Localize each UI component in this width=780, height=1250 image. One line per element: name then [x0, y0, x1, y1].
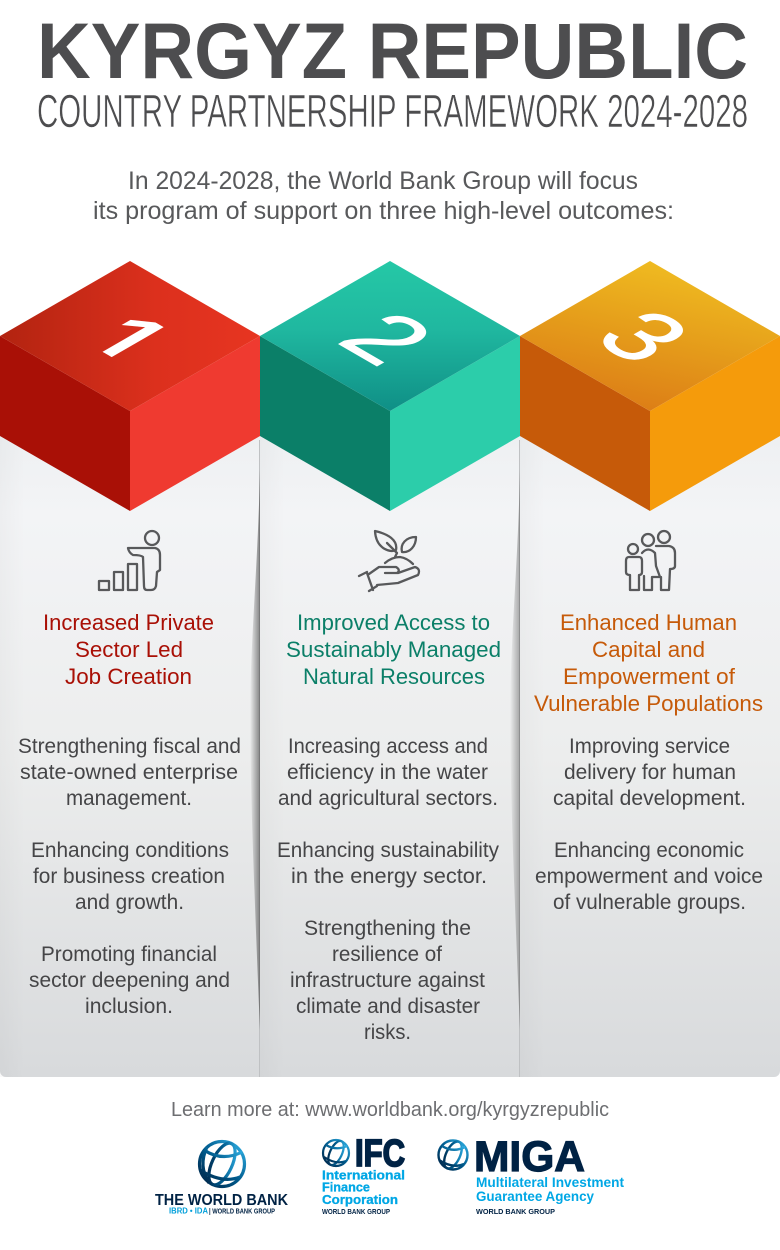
- intro text: its program of support on three high-level outcomes:: [93, 197, 674, 225]
- logo: The World Bank: THE WORLD BANK: [155, 1192, 288, 1209]
- column 1 body text: Strengthening fiscal and: [18, 735, 241, 758]
- column 2 body text: Strengthening the: [304, 917, 471, 940]
- column 1 heading: Increased Private: [43, 610, 214, 635]
- column 2 body text: [277, 735, 499, 1044]
- column 1 body text: state-owned enterprise: [20, 761, 238, 784]
- column 2 heading: Improved Access to: [297, 610, 490, 635]
- icon: hand holding plant: [359, 531, 419, 591]
- logo: MIGA: WORLD BANK GROUP: [476, 1207, 555, 1216]
- cube 1: [0, 261, 260, 511]
- column 2 body text: resilience of: [332, 943, 442, 966]
- learn more link text: Learn more at: www.worldbank.org/kyrgyzrepublic: [171, 1098, 609, 1121]
- column 2 body text: climate and disaster: [296, 995, 480, 1018]
- intro text: In 2024-2028, the World Bank Group will focus: [128, 167, 638, 195]
- column 1 body text: Enhancing conditions: [31, 839, 229, 862]
- column 1 body text: [18, 735, 241, 1018]
- column 1 body text: and growth.: [75, 891, 184, 914]
- cube 3: [520, 261, 780, 511]
- column 3 body text: capital development.: [553, 787, 746, 810]
- icon: IFC globe: [323, 1139, 349, 1167]
- logo: IFC: Corporation: [322, 1192, 398, 1207]
- logo: IFC: [322, 1133, 405, 1216]
- number 3: 3: [574, 297, 713, 377]
- column 3 body text: Improving service: [569, 735, 730, 758]
- logo: MIGA: [438, 1133, 624, 1216]
- column 2 body text: infrastructure against: [290, 969, 485, 992]
- column 3 heading: Empowerment of: [563, 664, 736, 689]
- column 3 heading: Vulnerable Populations: [534, 691, 763, 716]
- column 1 body text: inclusion.: [85, 995, 173, 1018]
- column 2 body text: efficiency in the water: [287, 761, 488, 784]
- icon: World Bank globe: [200, 1139, 244, 1189]
- column 2 body text: and agricultural sectors.: [278, 787, 498, 810]
- logo: The World Bank: [155, 1139, 288, 1216]
- icon: family: [626, 531, 675, 590]
- column 2 body text: risks.: [364, 1021, 411, 1044]
- intro text: [93, 167, 674, 225]
- column 1 heading: Sector Led: [75, 637, 183, 662]
- cube 2: [260, 261, 520, 511]
- number 2: 2: [317, 299, 456, 379]
- column 2 heading: Sustainably Managed: [286, 637, 501, 662]
- column 3 body text: [535, 735, 763, 914]
- column 1 body text: sector deepening and: [29, 969, 230, 992]
- column 1 body text: for business creation: [33, 865, 225, 888]
- column 3 body text: delivery for human: [564, 761, 736, 784]
- column 2 body text: Enhancing sustainability: [277, 839, 499, 862]
- logo: IFC: IFC: [355, 1133, 405, 1175]
- column 3 heading: Enhanced Human: [560, 610, 737, 635]
- logo: IFC: Finance: [322, 1180, 370, 1194]
- icon: person with rising bars: [99, 531, 160, 590]
- logo: MIGA: MIGA: [474, 1133, 585, 1181]
- title: [37, 6, 748, 137]
- column 2 heading: Natural Resources: [303, 664, 485, 689]
- logo: MIGA: Multilateral Investment: [476, 1174, 624, 1190]
- column 3 body text: empowerment and voice: [535, 865, 763, 888]
- icon: MIGA globe: [438, 1139, 468, 1171]
- logo: IFC: International: [322, 1168, 405, 1182]
- column 1 heading: Job Creation: [65, 664, 192, 689]
- column 3 heading: [534, 610, 763, 716]
- panel: three columns background: [0, 436, 780, 1077]
- column 3 body text: Enhancing economic: [554, 839, 744, 862]
- column 3 body text: of vulnerable groups.: [553, 891, 746, 914]
- logo: The World Bank: | WORLD BANK GROUP: [209, 1206, 275, 1216]
- logo: MIGA: Guarantee Agency: [476, 1188, 594, 1204]
- column 2 body text: in the energy sector.: [291, 865, 487, 888]
- number 1: 1: [52, 299, 200, 384]
- column 2 body text: Increasing access and: [288, 735, 488, 758]
- column 3 heading: Capital and: [592, 637, 705, 662]
- logo: The World Bank: IBRD • IDA: [169, 1206, 208, 1216]
- column 1 body text: management.: [66, 787, 192, 810]
- column 1 heading: [43, 610, 214, 689]
- column 1 body text: Promoting financial: [41, 943, 217, 966]
- title: KYRGYZ REPUBLIC: [37, 6, 748, 95]
- logo: IFC: WORLD BANK GROUP: [322, 1209, 390, 1216]
- column 2 heading: [286, 610, 501, 689]
